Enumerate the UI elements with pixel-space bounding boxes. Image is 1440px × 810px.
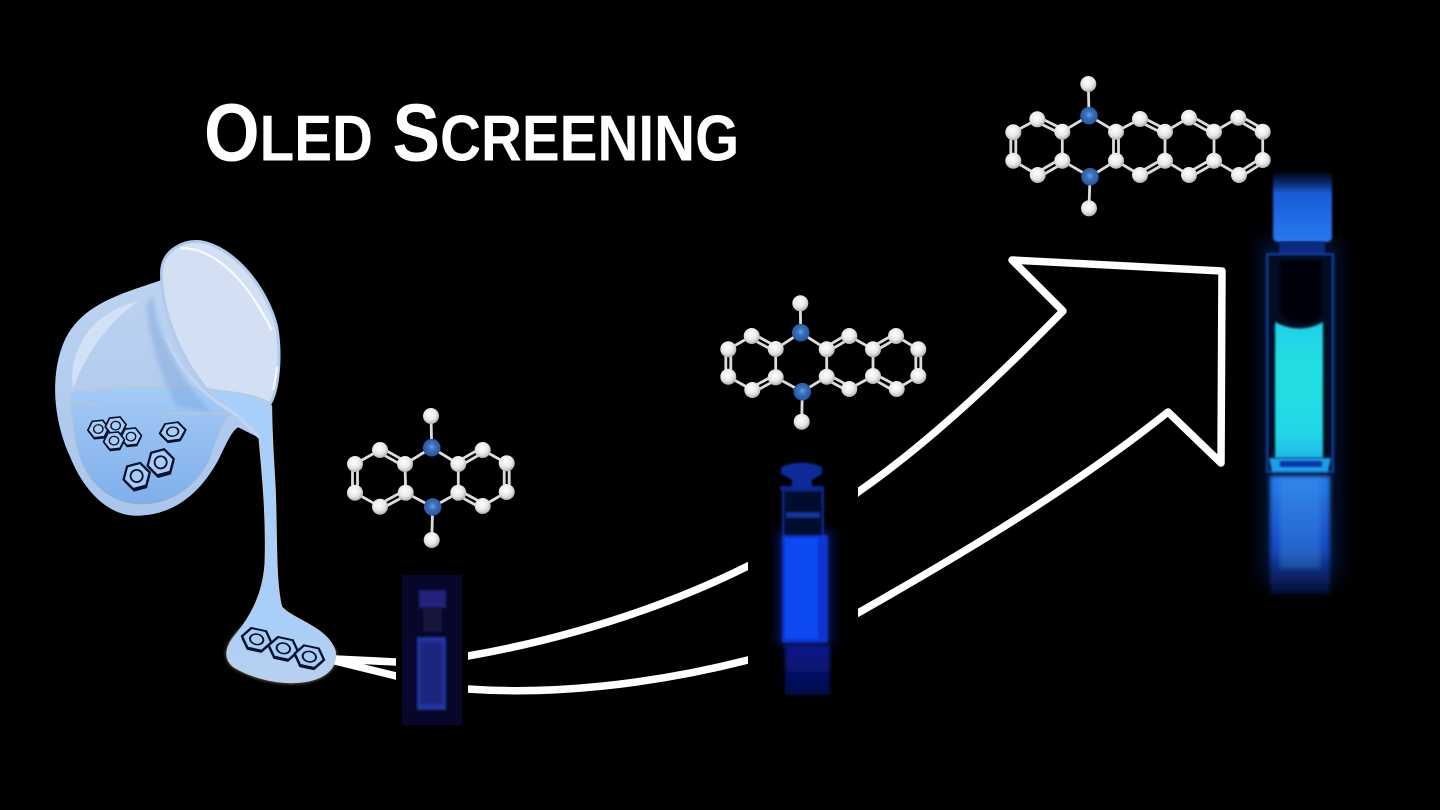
vial 2: medium blue emission — [748, 420, 858, 705]
upper glass — [783, 490, 823, 540]
atoms — [1005, 76, 1271, 216]
cap — [780, 462, 824, 490]
molecule in droplet — [239, 626, 326, 672]
neck shadow — [147, 297, 210, 412]
title: CREENING — [440, 102, 739, 174]
liquid — [782, 535, 828, 643]
beaker lip — [166, 337, 259, 437]
glow — [1262, 240, 1338, 580]
poured stream — [208, 390, 336, 683]
bonds — [352, 416, 509, 540]
rim highlight — [180, 248, 277, 390]
cuvette base — [1269, 458, 1331, 472]
vial 1: faint emission — [396, 575, 468, 725]
title: OLED — [204, 87, 373, 179]
beaker body — [55, 280, 272, 516]
liquid surface line — [73, 401, 230, 413]
bonds — [726, 303, 921, 422]
beaker rim opening — [162, 241, 279, 404]
liquid in beaker — [70, 387, 240, 505]
bonds — [1011, 84, 1264, 208]
molecule 3: five-ring azaacene — [1005, 76, 1271, 216]
atoms — [720, 295, 926, 430]
reflection — [1270, 476, 1330, 594]
liquid — [417, 637, 446, 710]
cuvette frame — [1267, 254, 1333, 472]
arrow: growth arrow from droplet to brightest vial — [335, 260, 1222, 691]
empty upper part — [1280, 260, 1322, 323]
cyan liquid — [1275, 322, 1323, 458]
beaker highlight — [72, 300, 140, 388]
cap — [1273, 172, 1332, 242]
glow — [778, 530, 832, 645]
droplet glow — [227, 622, 336, 683]
molecules in beaker — [87, 416, 187, 493]
molecule 1: dihydrophenazine — [347, 408, 515, 548]
molecule 2: four-ring azaacene — [720, 295, 926, 430]
title: S — [392, 87, 440, 179]
icon: pouring beaker with liquid and droplet — [55, 241, 336, 683]
vial 3: bright cyan emission — [1262, 172, 1338, 594]
atoms — [347, 408, 515, 548]
reflection — [785, 645, 830, 695]
neck — [1279, 242, 1325, 254]
cap — [419, 590, 446, 608]
